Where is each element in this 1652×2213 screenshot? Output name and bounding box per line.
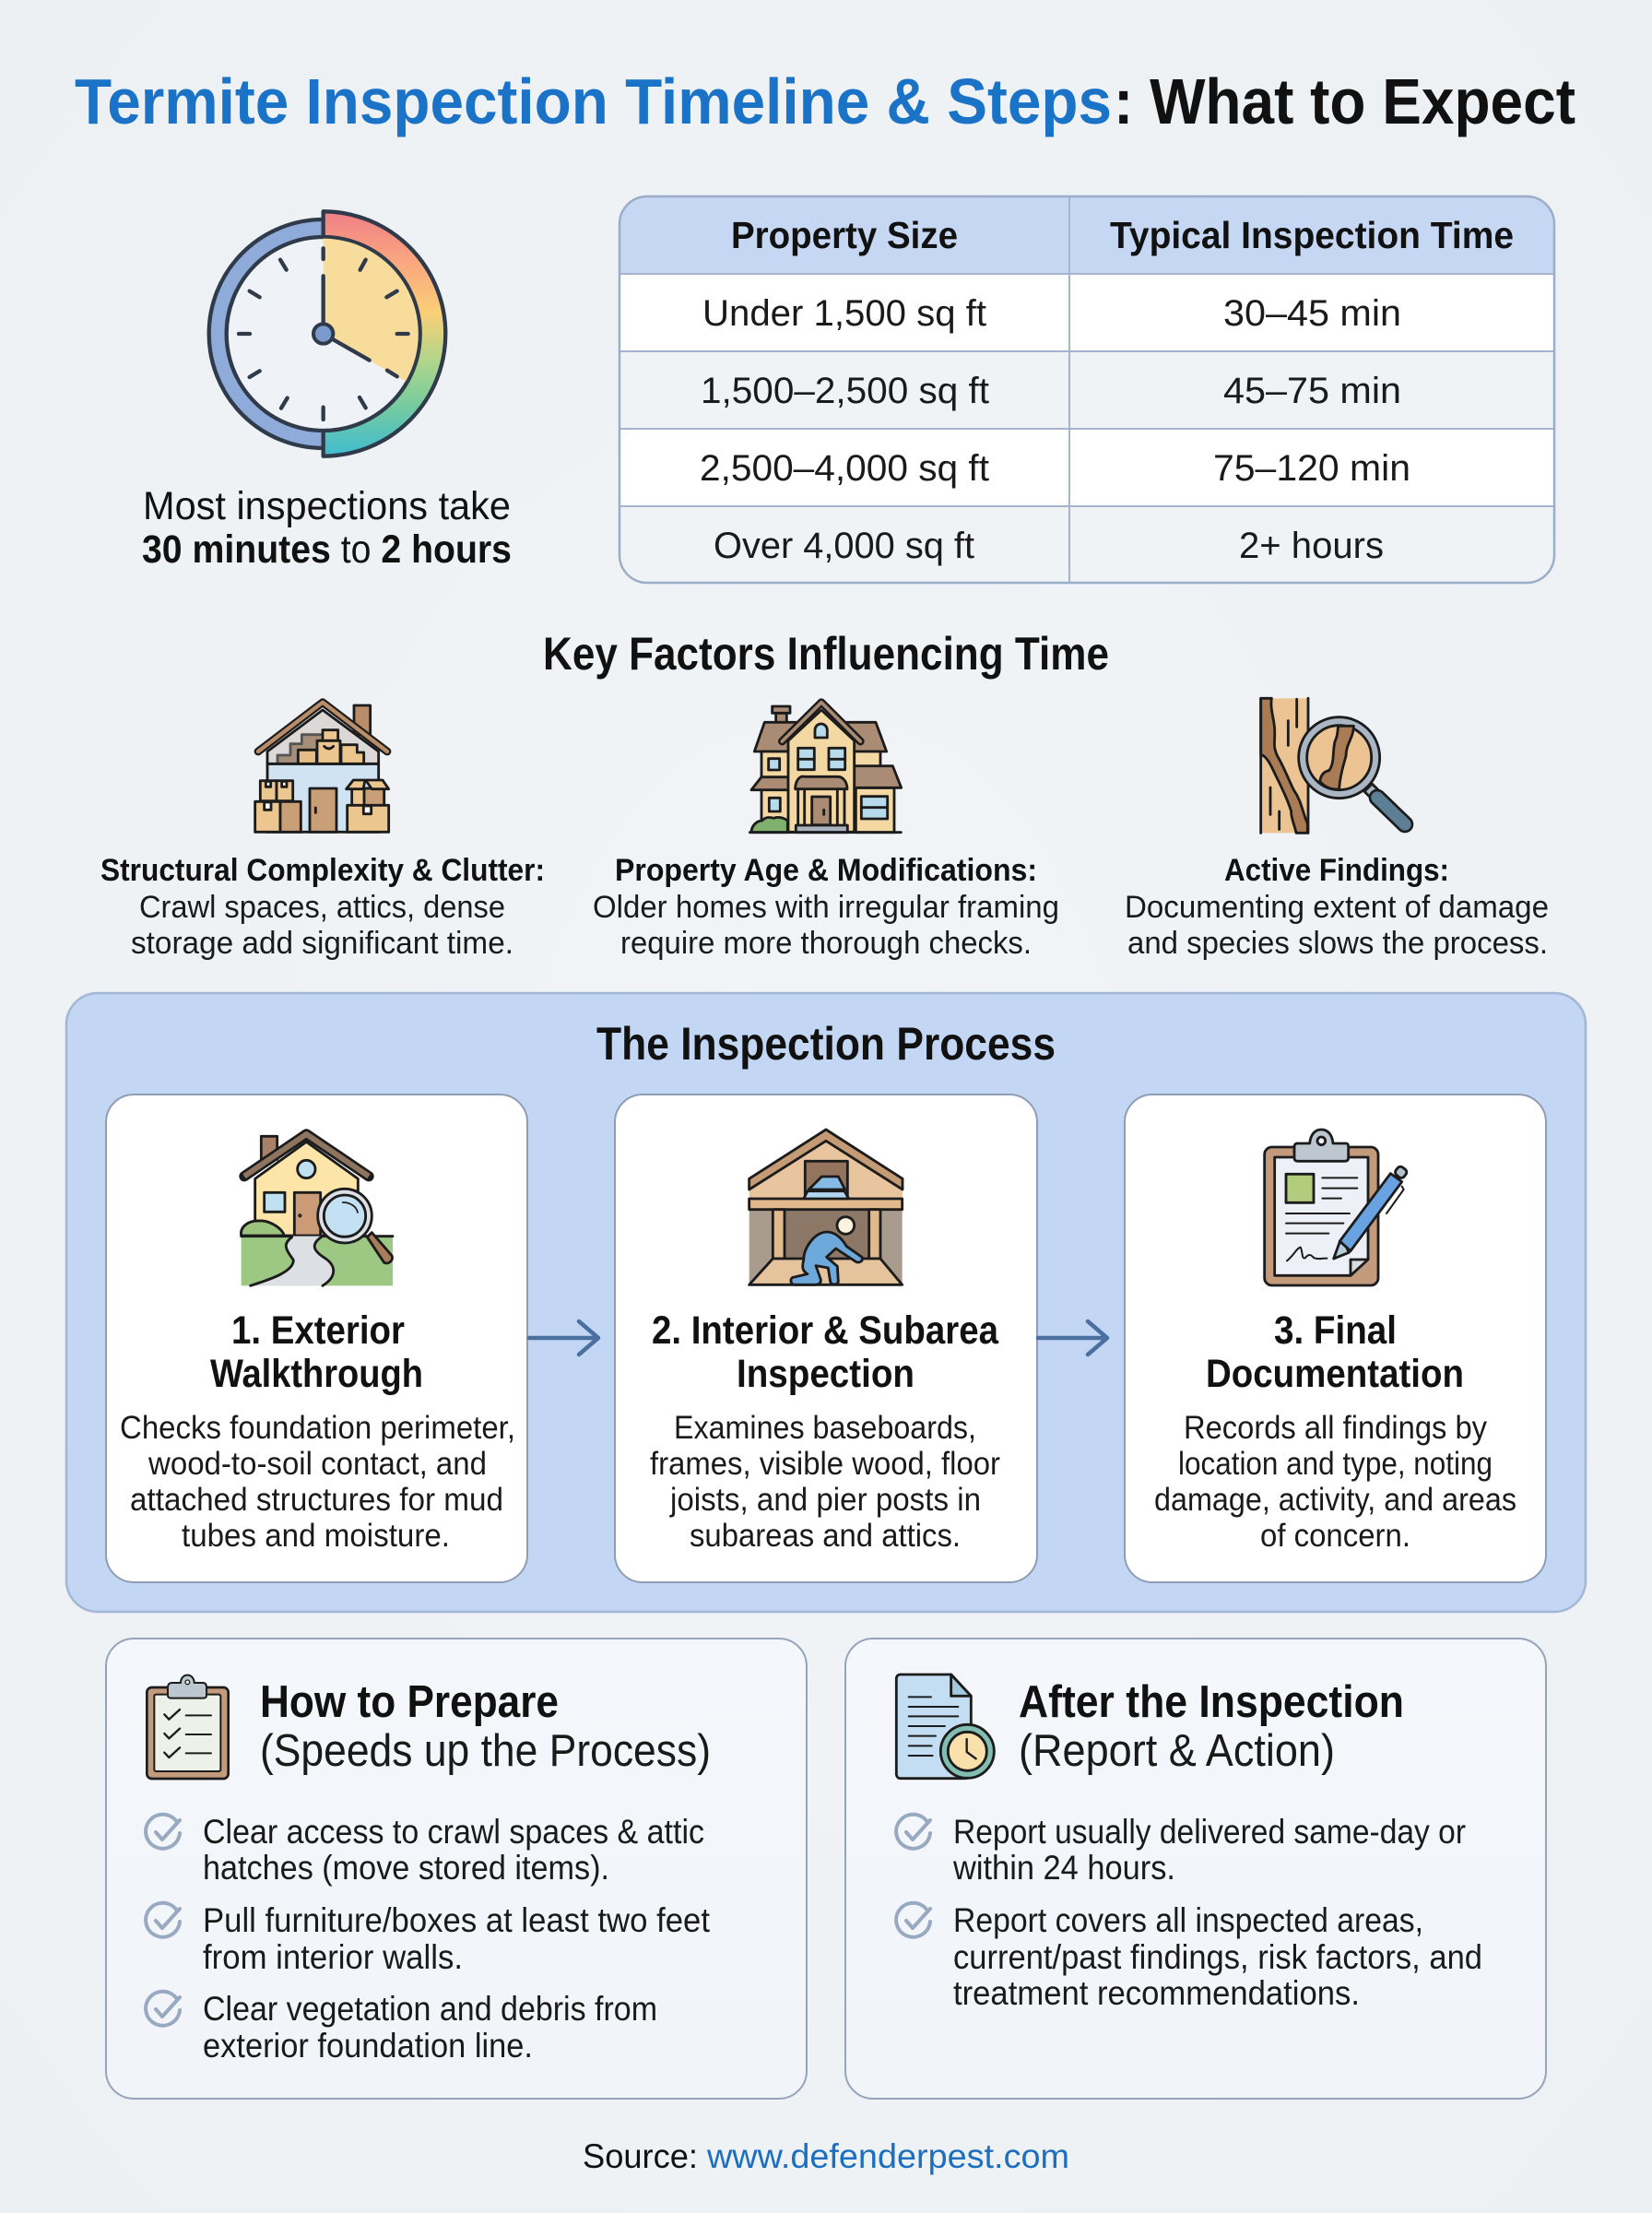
checklist items: Report usually delivered same-day or (953, 1812, 1466, 1851)
panel heading: (Speeds up the Process) (260, 1726, 711, 1776)
check icon (146, 1903, 180, 1937)
card text (650, 1409, 1000, 1554)
table rows: 75–120 min (1213, 448, 1410, 489)
factor 2 text (593, 853, 1059, 961)
card title: 1. Exterior (231, 1308, 405, 1353)
checklist items: Clear access to crawl spaces & attic (203, 1812, 704, 1851)
factor 1 text: storage add significant time. (131, 926, 513, 961)
card text: wood-to-soil contact, and (148, 1445, 487, 1482)
checklist items: Report covers all inspected areas, (953, 1900, 1423, 1939)
card text (120, 1409, 515, 1554)
checklist items: exterior foundation line. (203, 2026, 533, 2065)
source line: Source: (583, 2136, 698, 2175)
card title: Inspection (737, 1352, 914, 1396)
icon: large older house (749, 703, 902, 833)
card title: 2. Interior & Subarea (652, 1308, 999, 1353)
table rows: 1,500–2,500 sq ft (701, 371, 989, 411)
title: Termite Inspection Timeline & Steps (75, 65, 1112, 137)
card title (1206, 1308, 1464, 1396)
check icon (896, 1903, 930, 1937)
table rows: 2+ hours (1239, 526, 1384, 566)
panel: after the inspection (845, 1639, 1546, 2099)
checklist items: Pull furniture/boxes at least two feet (203, 1900, 711, 1939)
panel heading: (Report & Action) (1019, 1726, 1335, 1776)
factor 3 text: and species slows the process. (1127, 926, 1548, 961)
card text: of concern. (1260, 1517, 1410, 1554)
panel heading (260, 1677, 711, 1776)
factor 1 text: Crawl spaces, attics, dense (139, 890, 505, 925)
check icon (146, 1815, 180, 1849)
card: step 1 (106, 1095, 527, 1582)
factor 2 text: require more thorough checks. (620, 926, 1032, 961)
card text: frames, visible wood, floor (650, 1445, 1000, 1482)
panel: how to prepare (106, 1639, 807, 2099)
checklist items: from interior walls. (203, 1937, 463, 1976)
card text: damage, activity, and areas (1154, 1481, 1516, 1518)
icon: house full of boxes (255, 703, 389, 832)
factor 3 text (1125, 853, 1549, 961)
checklist items (146, 1812, 711, 2065)
checklist items: treatment recommendations. (953, 1973, 1360, 2012)
table header (731, 214, 1514, 256)
checklist items: within 24 hours. (952, 1848, 1175, 1887)
clock caption: 30 minutes to 2 hours (142, 527, 512, 572)
table header: Typical Inspection Time (1110, 214, 1514, 256)
factor 1 text: Structural Complexity & Clutter: (100, 853, 545, 888)
icon: clock (209, 211, 445, 456)
clock caption: Most inspections take (143, 484, 511, 528)
icon: house with magnifier (241, 1134, 393, 1285)
card text: joists, and pier posts in (669, 1481, 981, 1518)
panel heading: The Inspection Process (596, 1018, 1056, 1070)
card: step 2 (615, 1095, 1037, 1582)
checklist items: Clear vegetation and debris from (203, 1989, 657, 2028)
card text: attached structures for mud (130, 1481, 503, 1518)
icon: damaged wood and magnifier (1261, 698, 1405, 833)
factor 1 text (100, 853, 545, 961)
icon: checklist clipboard (147, 1675, 229, 1779)
table header: Property Size (731, 214, 958, 256)
table rows: Over 4,000 sq ft (714, 526, 974, 566)
card title (652, 1308, 999, 1396)
card text: tubes and moisture. (182, 1517, 450, 1554)
checklist items: hatches (move stored items). (203, 1848, 609, 1887)
card text: Checks foundation perimeter, (120, 1409, 515, 1446)
factor 2 text: Older homes with irregular framing (593, 890, 1059, 925)
clock caption (142, 484, 512, 572)
arrow: step 1 to step 2 (529, 1321, 598, 1355)
table rows (700, 293, 1410, 566)
card text: subareas and attics. (690, 1517, 961, 1554)
icon: clipboard and pen (1265, 1130, 1408, 1285)
check icon (896, 1815, 930, 1849)
table rows: 30–45 min (1223, 293, 1401, 334)
table rows: 2,500–4,000 sq ft (700, 448, 989, 489)
heading: key factors: Key Factors Influencing Time (543, 628, 1109, 680)
card: step 3 (1125, 1095, 1546, 1582)
card text (1154, 1409, 1516, 1554)
card text: Examines baseboards, (674, 1409, 976, 1446)
source line: www.defenderpest.com (706, 2136, 1069, 2175)
table rows: 45–75 min (1223, 371, 1401, 411)
panel heading (1019, 1677, 1404, 1776)
icon: crawl space inspection (749, 1130, 903, 1284)
table rows: Under 1,500 sq ft (702, 293, 986, 334)
card title: Walkthrough (210, 1352, 423, 1396)
factor 3 text: Active Findings: (1224, 853, 1449, 888)
panel: the inspection process (66, 993, 1586, 1612)
title: : What to Expect (1114, 65, 1575, 137)
panel heading: After the Inspection (1019, 1677, 1404, 1727)
card title: Documentation (1206, 1352, 1464, 1396)
card text: Records all findings by (1184, 1409, 1487, 1446)
factor 3 text: Documenting extent of damage (1125, 890, 1549, 925)
card title: 3. Final (1274, 1308, 1397, 1353)
panel heading: How to Prepare (260, 1677, 559, 1727)
factor 2 text: Property Age & Modifications: (615, 853, 1037, 888)
checklist items: current/past findings, risk factors, and (953, 1937, 1482, 1976)
checklist items (896, 1812, 1482, 2012)
table: property size and inspection time (620, 196, 1554, 583)
card title (210, 1308, 423, 1396)
icon: report with clock (896, 1675, 994, 1779)
check icon (146, 1992, 180, 2026)
card text: location and type, noting (1178, 1445, 1493, 1482)
arrow: step 2 to step 3 (1038, 1321, 1107, 1355)
